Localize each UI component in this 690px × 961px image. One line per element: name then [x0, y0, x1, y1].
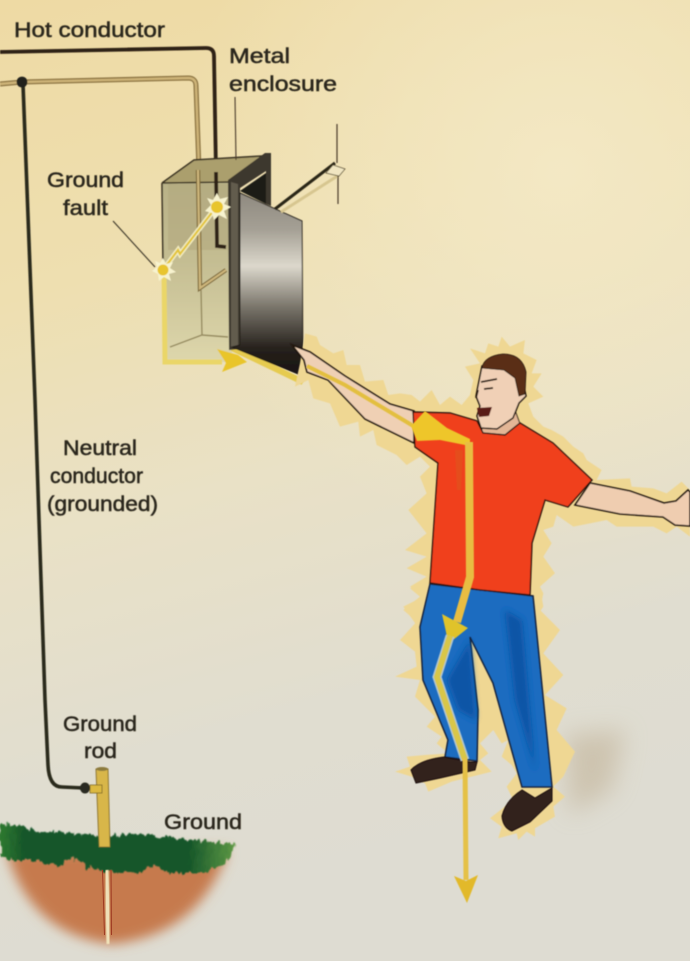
neck [481, 405, 520, 435]
fault path on enclosure [164, 270, 222, 362]
soil [6, 850, 228, 944]
door lower yellow edge [232, 348, 303, 382]
label: ground fault: Ground [47, 169, 124, 192]
label: ground: Ground [164, 811, 242, 834]
halo upper body [295, 333, 690, 630]
current arrow at shoulder [411, 411, 470, 446]
grass [0, 824, 236, 873]
ground fault spark [163, 206, 217, 270]
right arm [575, 483, 690, 526]
label: neutral conductor: conductor [50, 465, 143, 488]
ground cross-section [0, 767, 236, 944]
enclosure box body [162, 156, 262, 363]
current along arm [307, 366, 415, 427]
current arrow at hip [442, 614, 468, 644]
label: metal enclosure: Metal [229, 45, 290, 68]
label: ground fault [47, 169, 124, 220]
door panel [232, 193, 303, 376]
label: ground rod: rod [84, 740, 117, 763]
current path arrows through person [307, 366, 478, 903]
person [292, 345, 690, 831]
metal enclosure leader [235, 97, 236, 160]
label: neutral conductor [47, 437, 158, 516]
halo lower body [395, 580, 575, 840]
floor shadow [565, 730, 625, 815]
metal enclosure [113, 97, 345, 382]
label: ground fault: fault [63, 197, 108, 220]
label: metal enclosure: enclosure [229, 73, 337, 96]
current through leg [437, 636, 465, 760]
neutral conductor wire [0, 77, 199, 788]
ground rod below ground [106, 870, 109, 944]
label: neutral conductor: (grounded) [47, 493, 158, 516]
label: metal enclosure [229, 45, 337, 96]
ground rod above ground [80, 767, 110, 847]
eye and brow [476, 379, 497, 398]
label: ground rod: Ground [63, 713, 137, 736]
ground fault leader [113, 221, 155, 267]
mouth [477, 407, 492, 417]
shoes [411, 757, 477, 783]
hair [482, 354, 526, 396]
left arm [292, 345, 414, 443]
conduit rear [275, 163, 335, 209]
current to ground [465, 758, 466, 880]
head [476, 366, 526, 429]
door frame [228, 153, 271, 350]
label: hot conductor: Hot conductor [14, 19, 165, 42]
hot wire inside enclosure [216, 172, 226, 247]
label: ground rod [63, 713, 137, 763]
rod clamp [90, 785, 102, 793]
electric halo around person [295, 333, 690, 840]
hot conductor wire [0, 48, 216, 172]
label: neutral conductor: Neutral [63, 437, 137, 460]
jeans [420, 584, 552, 787]
door opening [240, 173, 266, 204]
neutral wire inside enclosure [198, 170, 226, 288]
shirt [413, 412, 592, 595]
current through torso [457, 442, 470, 622]
